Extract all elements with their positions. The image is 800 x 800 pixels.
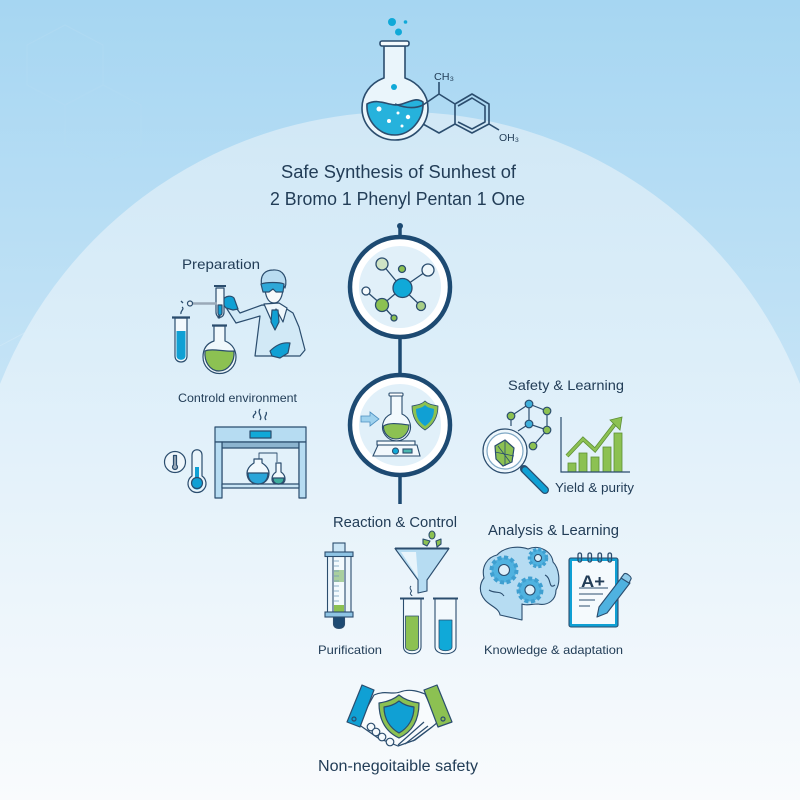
text: non-negotiable safety: Non-negoitaible safety: [318, 758, 478, 775]
icon: flask with molecule: OH₃: [499, 132, 519, 144]
icon: fume hood with thermometer: [164, 409, 306, 498]
heading: Safety and Learning: Safety & Learning: [508, 377, 624, 393]
icon: brain with gears: [480, 547, 559, 620]
icon: chromatography column: [325, 543, 353, 628]
central timeline connector: [397, 223, 403, 504]
text: purification: Purification: [318, 643, 382, 657]
title: Safe Synthesis of Sunhest of: [281, 162, 517, 182]
text: knowledge and adaptation: Knowledge & adaptation: [484, 643, 623, 657]
icon: scientist with glassware: [172, 270, 305, 374]
heading: Reaction and Control: Reaction & Control: [333, 515, 457, 531]
icon: flask with molecule: [362, 18, 519, 144]
icon: notepad with pencil: A+: [581, 572, 605, 591]
icon: handshake with shield: [347, 685, 452, 746]
title: [270, 162, 525, 209]
ring: reaction flask and shield: [350, 375, 450, 475]
icon: network and magnifier: [483, 400, 551, 490]
bar chart: yield and purity: [561, 417, 630, 472]
icon: notepad with pencil: [569, 553, 631, 627]
text: controlled environment label: Controld environment: [178, 391, 298, 405]
title: 2 Bromo 1 Phenyl Pentan 1 One: [270, 189, 525, 209]
text: yield and purity: Yield & purity: [555, 481, 635, 495]
icon: flask with molecule: CH₃: [434, 71, 454, 83]
ring: molecule: [350, 237, 450, 337]
heading: Preparation: Preparation: [182, 256, 260, 272]
heading: Analysis and Learning: Analysis & Learning: [488, 523, 619, 539]
icon: filter funnel with test tubes: [395, 531, 458, 654]
